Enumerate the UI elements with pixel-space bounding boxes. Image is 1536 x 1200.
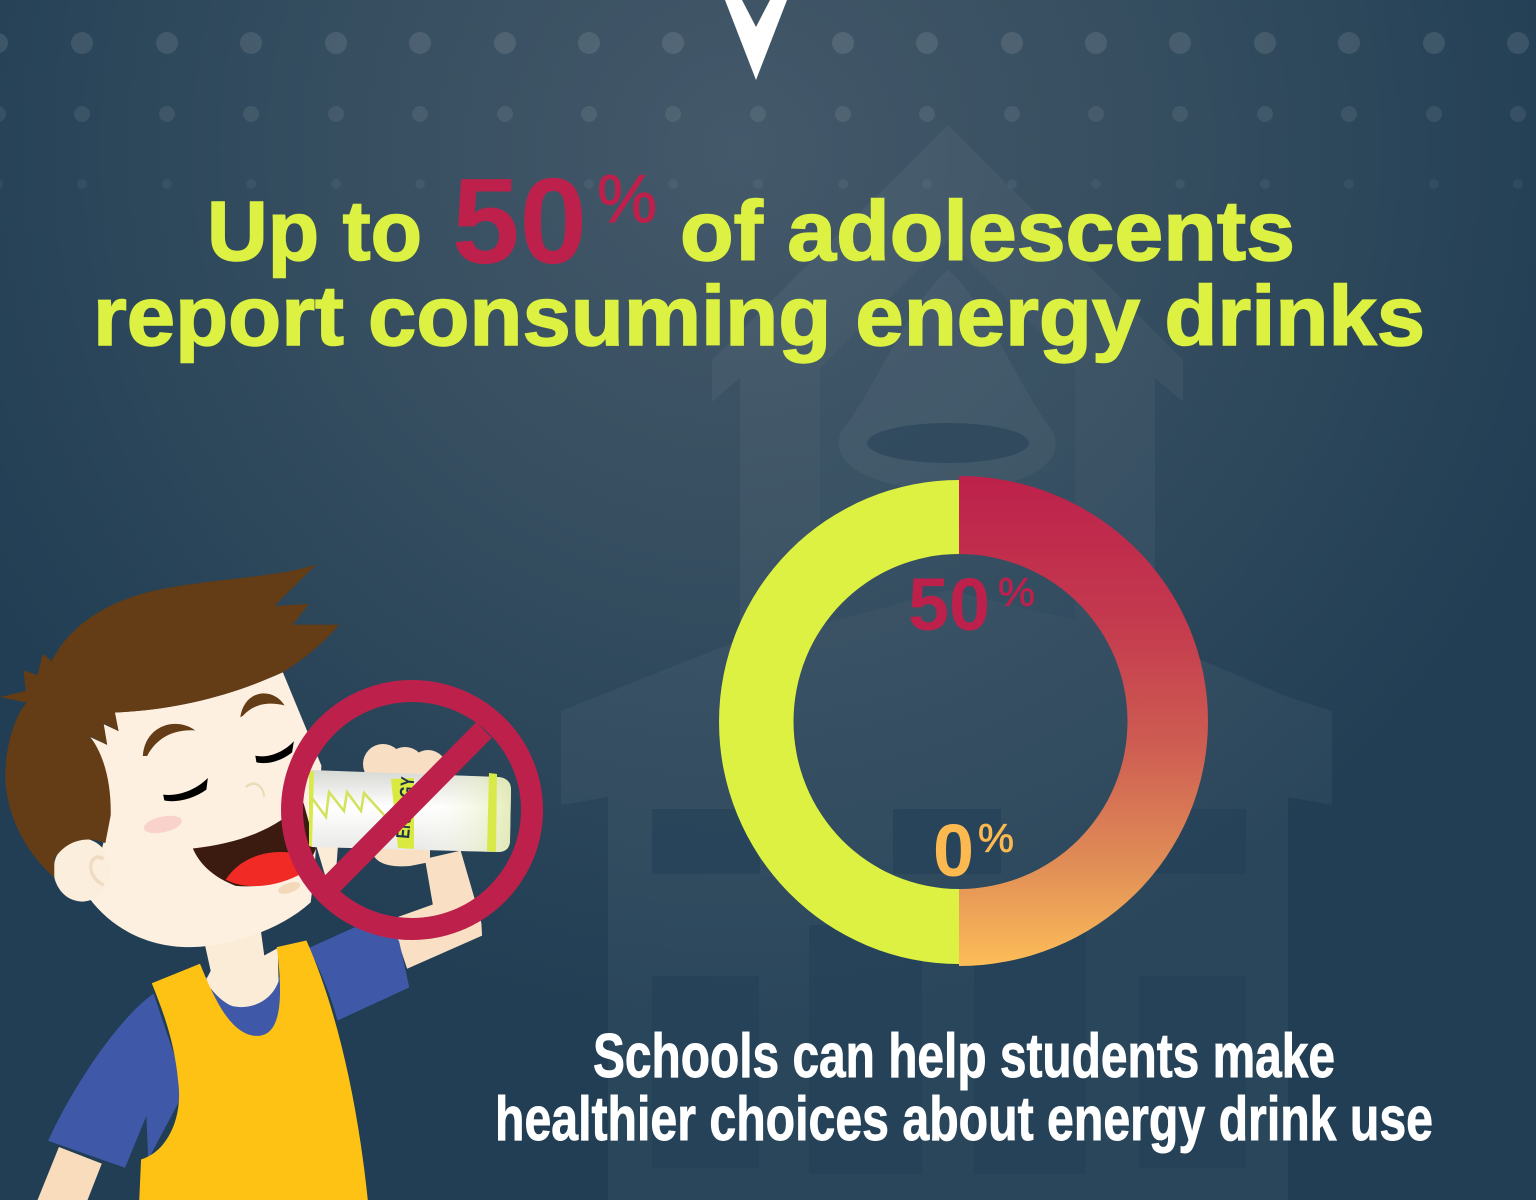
heading: [93, 153, 1425, 363]
energy drink can: [308, 770, 511, 852]
heading figure: 50 percent: 50: [452, 153, 587, 289]
heading line 1 start: Up to: [207, 184, 422, 278]
heading line 2: report consuming energy drinks: [93, 269, 1425, 363]
donut label: 0 percent: 0: [933, 809, 974, 892]
background school silhouette: [561, 125, 1332, 1200]
eyebrows: [143, 693, 285, 756]
heading figure: 50 percent: [452, 153, 657, 289]
can bands: [309, 771, 497, 852]
donut label: 50 percent: [908, 563, 1035, 646]
mouth: [193, 803, 316, 886]
donut: gradient half: [959, 476, 1208, 966]
no symbol: [292, 691, 532, 929]
donut label: 0 percent: %: [978, 817, 1014, 861]
donut label: 0 percent: [933, 809, 1014, 892]
can label text: ENERGY: [393, 776, 419, 839]
tongue: [226, 852, 302, 886]
left arm: [37, 1147, 102, 1200]
ear: [54, 839, 111, 902]
donut: lime half: [719, 480, 959, 964]
closing message: [495, 1022, 1433, 1154]
can label: [391, 778, 414, 849]
heading line 1 end: of adolescents: [680, 184, 1295, 278]
heading figure: 50 percent: %: [597, 161, 657, 237]
donut label: 50 percent: %: [998, 571, 1035, 615]
cheek: [143, 813, 183, 836]
vest: [139, 941, 368, 1200]
hand below can: [370, 840, 430, 866]
lip shadow: [277, 880, 301, 896]
face: [89, 672, 321, 947]
right forearm: [398, 851, 482, 969]
boy drinking: [0, 565, 482, 1200]
hair: [0, 565, 339, 878]
can zigzag: [312, 792, 385, 817]
background dots: [0, 32, 1529, 189]
message line 1: Schools can help students make: [593, 1022, 1335, 1091]
eyes: [163, 741, 294, 801]
fingers: [363, 744, 447, 788]
nose: [246, 784, 264, 797]
shirt: [48, 914, 409, 1168]
donut chart: [719, 476, 1208, 966]
neck: [204, 929, 279, 1007]
donut label: 50 percent: 50: [908, 563, 990, 646]
thumb at mouth: [316, 845, 338, 875]
down arrow chevron: [725, 0, 787, 80]
